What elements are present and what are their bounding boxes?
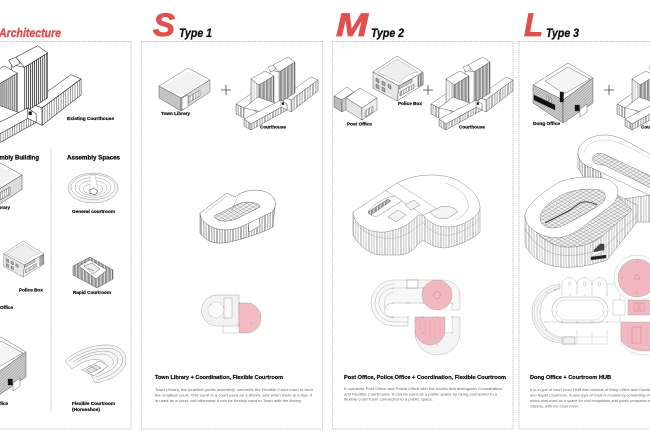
icon: post office — [334, 87, 377, 120]
caption text M: and Flexible Courtrooms. It can be used as a public space by being connected to a — [344, 392, 498, 396]
icon: dong office — [533, 63, 593, 123]
label: post office: Post Office — [347, 122, 372, 126]
label: general courtroom: General courtroom — [72, 209, 115, 214]
icon: dong office — [0, 337, 26, 397]
icon: plus — [604, 85, 614, 95]
label: rapid courtroom: Rapid Courtroom — [73, 290, 111, 295]
icon: police box — [373, 56, 423, 101]
heading: type 3: Type 3 — [546, 26, 579, 40]
panel: assembly architecture — [0, 26, 131, 429]
caption heading S: Town Library + Coordination, Flexible Courtroom — [155, 375, 283, 381]
panel: L type 3 — [519, 7, 650, 429]
floor plan S — [202, 295, 261, 333]
icon: flexible courtroom horseshoe — [65, 345, 126, 383]
label: town library: Town Library — [161, 111, 190, 116]
label: courthouse: Courthouse — [260, 124, 286, 130]
caption text S: Town Library, the smallest public assembly, connects the Flexible Court room to form — [155, 387, 313, 392]
heading: assembly spaces: Assembly Spaces — [67, 156, 121, 162]
label: dong office: Dong Office — [533, 121, 560, 126]
label: flexible courtroom: Flexible Courtroom — [72, 401, 115, 406]
icon: courthouse — [236, 57, 318, 130]
isometric building: courtroom M — [353, 175, 480, 255]
caption text M — [344, 386, 502, 402]
label: police box: Police Box — [19, 288, 43, 292]
icon: general courtroom — [68, 173, 118, 203]
isometric building: courtroom hub L — [525, 135, 650, 267]
label: police box: Police Box — [398, 101, 422, 106]
caption text S: is used as a court, but otherwise it can be flexibly used in Town with the library. — [155, 398, 302, 403]
panel: S type 1 — [142, 7, 323, 429]
icon: police box — [4, 241, 44, 277]
floor plan L — [532, 255, 650, 355]
icon: town library — [159, 68, 210, 111]
isometric building: flexible courtroom S — [200, 190, 275, 243]
icon: courthouse — [431, 57, 513, 130]
panel: M type 2 — [332, 7, 513, 429]
icon: plus — [221, 85, 231, 95]
icon: town library — [0, 161, 22, 212]
heading letter L: L — [524, 7, 543, 43]
label: courthouse: Courthouse — [459, 124, 485, 130]
icon: rapid courtroom — [73, 257, 113, 288]
divider — [50, 148, 52, 412]
caption text L: citizens, with the court room. — [530, 404, 579, 408]
heading: architecture: Architecture — [0, 26, 61, 40]
label: existing courthouse: Existing Courthouse — [67, 116, 114, 121]
caption text M: It connects Post Office and Police Office with the courts that distinguish Coordination — [344, 386, 502, 391]
heading: type 2: Type 2 — [371, 26, 404, 40]
heading letter S: S — [153, 7, 176, 43]
label: horseshoe: (Horseshoe) — [72, 407, 100, 412]
heading letter M: M — [336, 7, 370, 43]
floor plan M — [371, 280, 460, 355]
caption heading L: Dong Office + Courtroom HUB — [530, 375, 611, 381]
icon: plus — [423, 85, 433, 95]
caption text S: the smallest court. This court is a court used as a library, and when there is a trial, it — [155, 392, 313, 398]
caption text S — [155, 387, 313, 403]
caption text M: flexible court room connected to a public space. — [344, 396, 433, 402]
caption heading M: Post Office, Police Office + Coordination, Flexible Courtroom — [344, 375, 506, 381]
icon: courthouse — [617, 57, 650, 130]
caption text L — [530, 387, 650, 408]
heading: type 1: Type 1 — [179, 26, 212, 40]
icon: existing courthouse — [0, 46, 81, 152]
